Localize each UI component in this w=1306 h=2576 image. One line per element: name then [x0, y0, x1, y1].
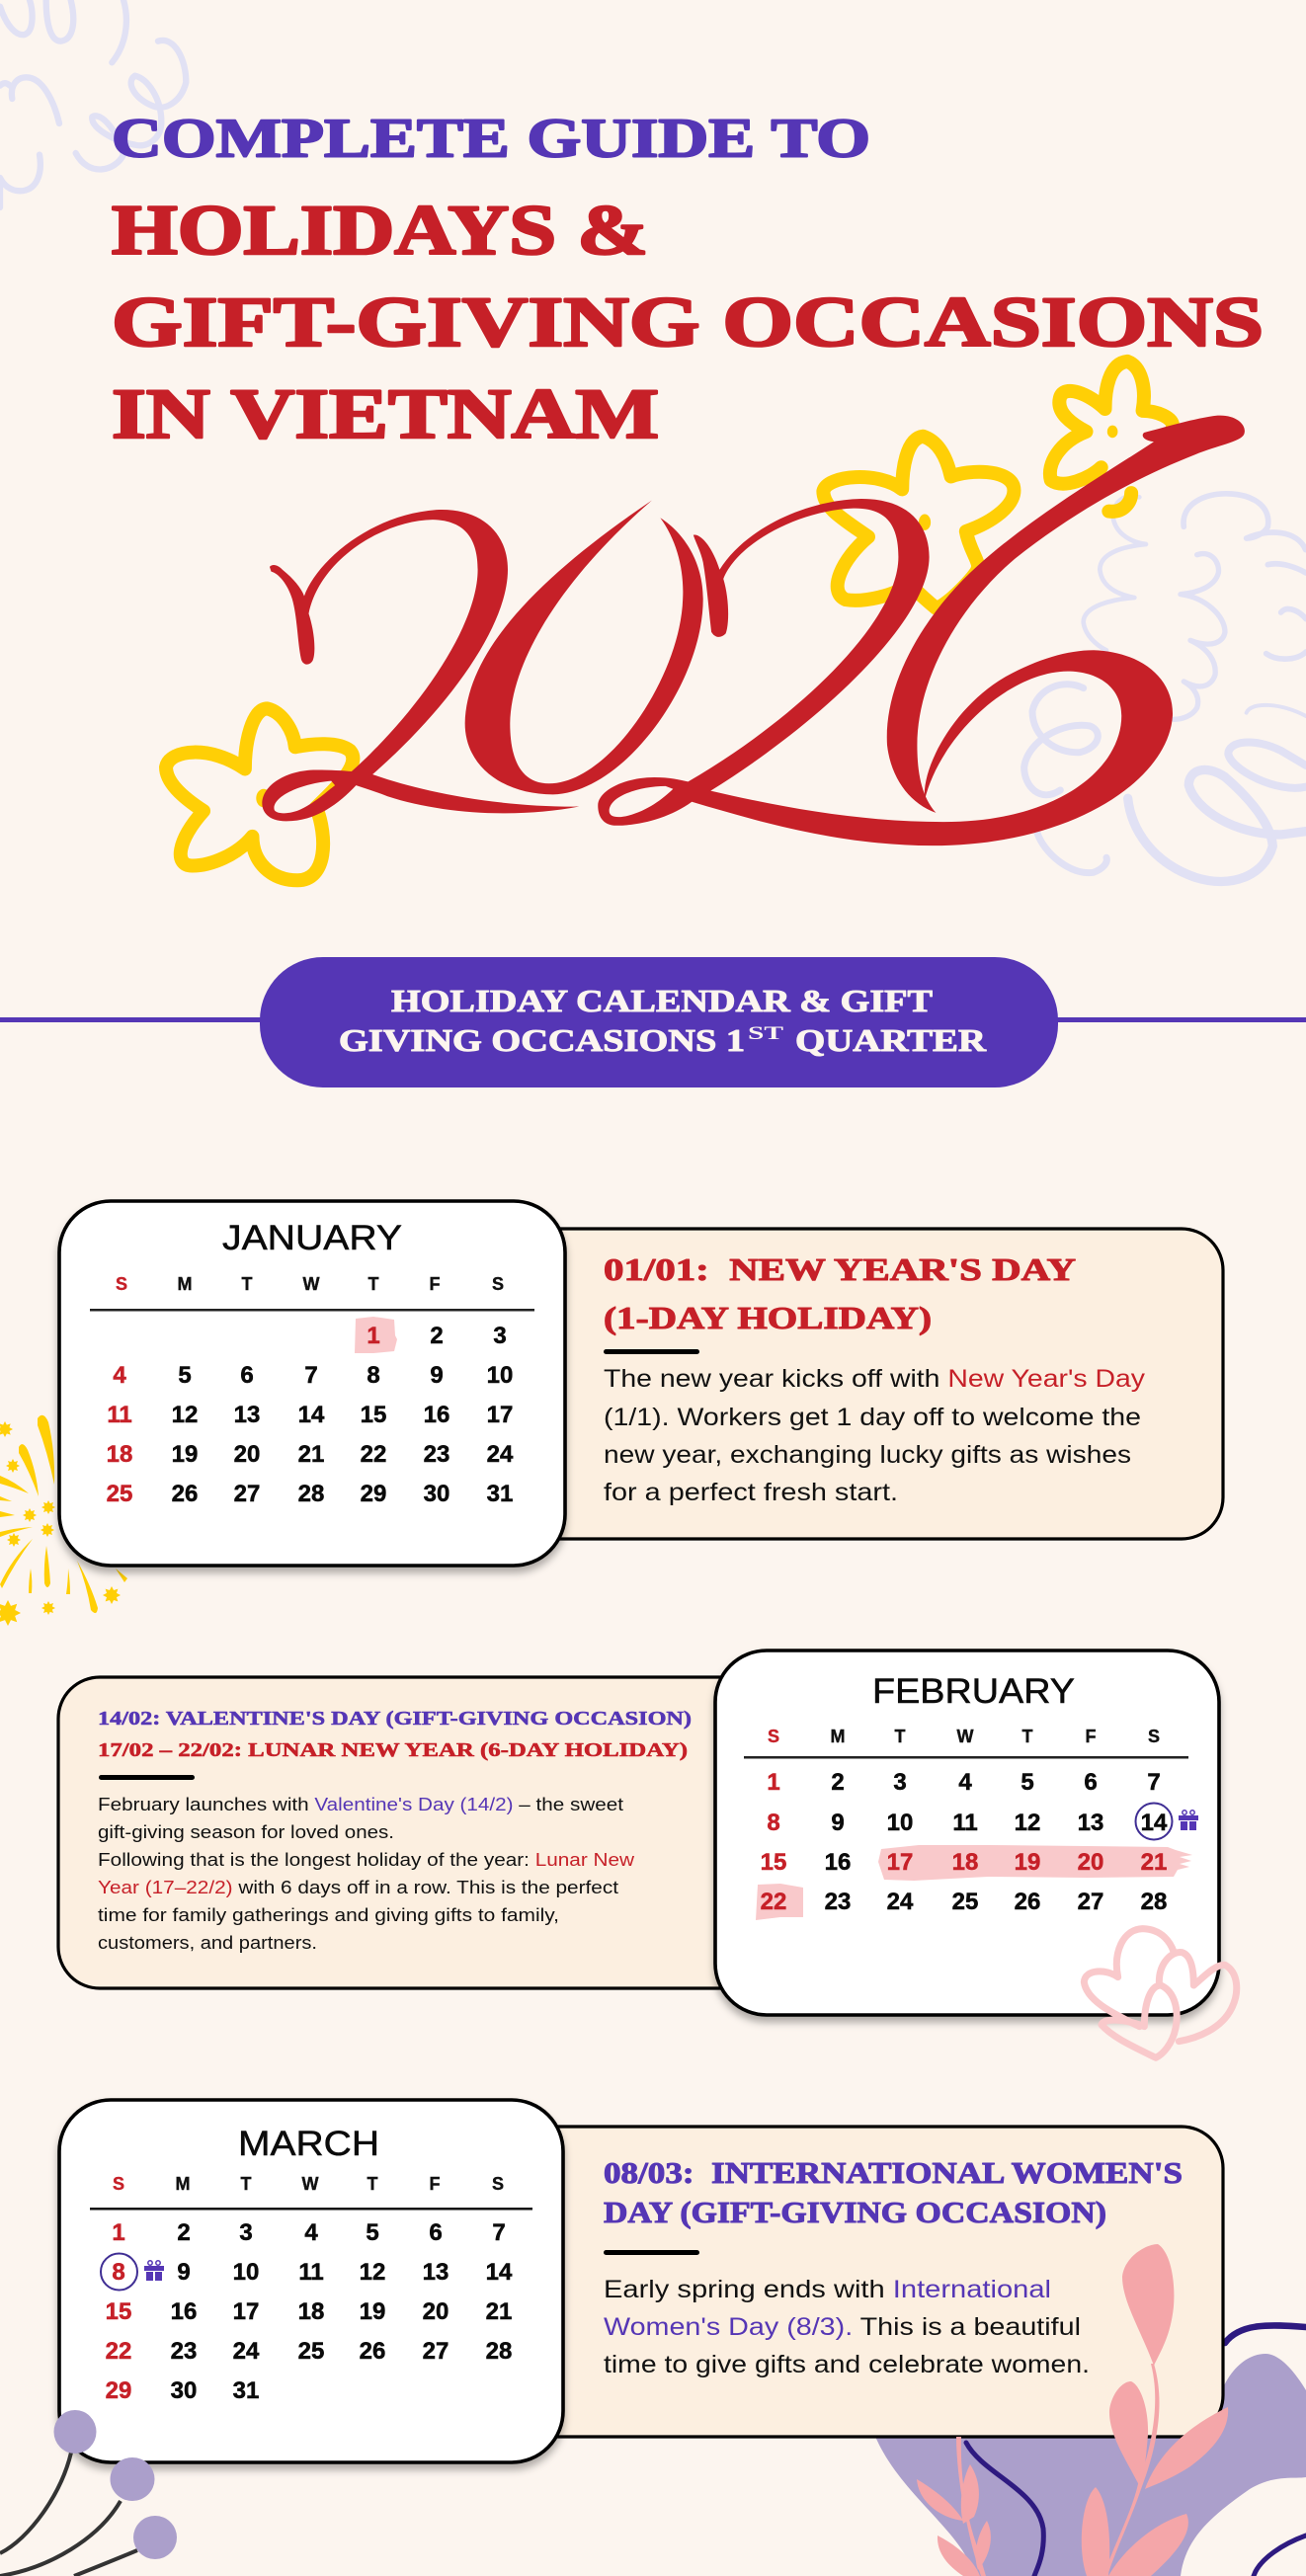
section banner: first quarter: QUARTER	[795, 1022, 987, 1058]
date grid: march: 27	[423, 2338, 449, 2365]
date grid: march: 17	[233, 2298, 259, 2325]
date grid: january: 14	[298, 1402, 325, 1428]
text: february description: gift-giving season for loved ones.	[98, 1822, 394, 1842]
calendar: march	[59, 2100, 563, 2462]
section banner: first quarter: ST	[748, 1023, 783, 1044]
title	[112, 109, 1264, 453]
heading: women's day: 08/03: INTERNATIONAL WOMEN'S	[604, 2155, 1183, 2190]
weekday header: T	[241, 2174, 251, 2194]
date grid: january: 10	[487, 1362, 513, 1389]
date grid: january: 7	[304, 1362, 318, 1389]
weekday header: S	[113, 2174, 124, 2194]
date grid: january: 23	[424, 1441, 449, 1468]
panel: international women's day	[514, 2127, 1223, 2437]
calendar: march: MARCH	[238, 2125, 379, 2163]
weekday header: T	[1021, 1727, 1033, 1746]
date grid: february: 2	[831, 1769, 845, 1796]
date grid: march: 14	[486, 2259, 513, 2286]
date grid: march: 3	[239, 2219, 253, 2246]
date grid: january: 19	[172, 1441, 198, 1468]
icon: gift	[1179, 1811, 1198, 1830]
date grid: february: 25	[952, 1889, 978, 1915]
date grid: january: 31	[487, 1481, 513, 1507]
decoration: lavender blob	[869, 2354, 1306, 2576]
date grid: march	[106, 2219, 513, 2404]
date grid: february: 15	[761, 1849, 786, 1876]
text: february description: customers, and partners.	[98, 1933, 317, 1953]
weekday header: F	[429, 1274, 441, 1294]
date grid: january: 4	[113, 1362, 126, 1389]
decoration: navy curved lines	[966, 2325, 1306, 2576]
date grid: january: 16	[424, 1402, 449, 1428]
heading: new year's day	[604, 1251, 1076, 1335]
date grid: january: 15	[361, 1402, 386, 1428]
heading: women's day: DAY (GIFT-GIVING OCCASION)	[604, 2195, 1106, 2229]
text: women's day description: Early spring ends with International	[604, 2276, 1051, 2303]
weekday header: T	[895, 1727, 905, 1746]
date grid: january: 28	[298, 1481, 324, 1507]
hero lettering: 2026	[262, 416, 1245, 845]
panel: new year's day	[514, 1229, 1223, 1539]
text: february description	[98, 1795, 635, 1953]
highlight: january 1	[355, 1317, 397, 1353]
date grid: march: 4	[304, 2219, 318, 2246]
weekday header: F	[1085, 1727, 1097, 1746]
heading: new year's day: 01/01: NEW YEAR'S DAY	[604, 1251, 1076, 1287]
panel: valentine's and lunar new year	[58, 1677, 770, 1988]
date grid: february: 27	[1078, 1889, 1103, 1915]
date grid: march: 11	[298, 2259, 324, 2286]
date grid: february: 5	[1020, 1769, 1034, 1796]
weekday header: W	[956, 1727, 974, 1746]
date grid: january: 22	[361, 1441, 386, 1468]
weekday header: S	[492, 1274, 504, 1294]
section banner: first quarter: GIVING OCCASIONS 1	[339, 1022, 745, 1058]
date grid: january: 1	[367, 1323, 380, 1349]
heading: lunar new year: 17/02 – 22/02: LUNAR NEW YEAR (6-DAY HOLIDAY)	[98, 1739, 688, 1761]
text: new year's day description: (1/1). Workers get 1 day off to welcome the	[604, 1404, 1141, 1431]
weekday header: M	[830, 1727, 846, 1746]
text: women's day description	[604, 2276, 1090, 2378]
date grid: january: 24	[487, 1441, 514, 1468]
date grid: february: 16	[825, 1849, 851, 1876]
date grid: february: 1	[767, 1769, 780, 1796]
date grid: february: 12	[1015, 1810, 1040, 1836]
date grid: january: 30	[424, 1481, 449, 1507]
date grid: march: 22	[106, 2338, 131, 2365]
date grid: march: 28	[486, 2338, 512, 2365]
date grid: march: 13	[423, 2259, 449, 2286]
date grid: january: 17	[487, 1402, 513, 1428]
date grid: march: 16	[171, 2298, 197, 2325]
weekday header	[113, 2174, 504, 2194]
date grid: february: 4	[958, 1769, 972, 1796]
text: new year's day description	[604, 1365, 1146, 1506]
date grid: january: 26	[172, 1481, 198, 1507]
heading: valentine's day: 14/02: VALENTINE'S DAY (GIFT-GIVING OCCASION)	[98, 1708, 692, 1730]
date grid: march: 9	[177, 2259, 191, 2286]
date grid: january: 29	[361, 1481, 386, 1507]
title line: holidays: HOLIDAYS &	[112, 191, 648, 270]
date grid: march: 12	[360, 2259, 385, 2286]
date grid: february: 18	[952, 1849, 978, 1876]
title line: in vietnam: IN VIETNAM	[112, 374, 659, 453]
date grid: february: 8	[767, 1810, 780, 1836]
date grid: march: 15	[106, 2298, 131, 2325]
date grid: january: 11	[107, 1402, 132, 1428]
date grid: january: 27	[234, 1481, 260, 1507]
weekday header: T	[367, 1274, 379, 1294]
date grid: february: 24	[887, 1889, 914, 1915]
weekday header: F	[429, 2174, 441, 2194]
icon: yellow flowers	[166, 362, 1173, 880]
date grid: january: 9	[430, 1362, 444, 1389]
date grid: january: 21	[298, 1441, 324, 1468]
date grid: february: 21	[1141, 1849, 1167, 1876]
text: women's day description: time to give gifts and celebrate women.	[604, 2351, 1090, 2378]
date grid: february: 20	[1078, 1849, 1103, 1876]
date grid: march: 21	[486, 2298, 512, 2325]
section banner: first quarter	[260, 957, 1058, 1087]
title line: gift-giving occasions: GIFT-GIVING OCCASIONS	[112, 282, 1264, 362]
icon: pink hearts	[1084, 1929, 1237, 2057]
weekday header: S	[1148, 1727, 1160, 1746]
calendar: january: JANUARY	[222, 1219, 402, 1257]
text: february description: time for family gatherings and giving gifts to family,	[98, 1905, 559, 1925]
weekday header: T	[241, 1274, 253, 1294]
date grid: february: 7	[1147, 1769, 1161, 1796]
decoration: top-left lavender swirls	[0, 0, 186, 207]
date grid: march: 29	[106, 2377, 131, 2404]
date grid: march: 19	[360, 2298, 385, 2325]
date grid: march: 1	[112, 2219, 125, 2246]
title line: complete guide: COMPLETE GUIDE TO	[112, 109, 870, 170]
date grid: january: 8	[367, 1362, 380, 1389]
weekday header: W	[302, 1274, 320, 1294]
date grid: january: 3	[493, 1323, 507, 1349]
date grid: february: 17	[887, 1849, 913, 1876]
heading: women's day	[604, 2155, 1183, 2229]
icon: gift	[144, 2261, 164, 2281]
text: new year's day description: new year, exchanging lucky gifts as wishes	[604, 1441, 1131, 1469]
weekday header: M	[176, 2174, 190, 2194]
date grid: march: 2	[177, 2219, 191, 2246]
date grid: january: 5	[178, 1362, 192, 1389]
decoration: right lavender swirls	[1024, 494, 1306, 881]
date grid: march: 5	[366, 2219, 379, 2246]
date grid: february	[761, 1769, 1168, 1915]
text: women's day description: Women's Day (8/3). This is a beautiful	[604, 2313, 1081, 2341]
highlight: february 22	[756, 1884, 803, 1920]
weekday header	[768, 1727, 1160, 1746]
date grid: january: 2	[430, 1323, 444, 1349]
calendar: february	[715, 1650, 1219, 2015]
date grid: february: 23	[825, 1889, 851, 1915]
weekday header: S	[768, 1727, 779, 1746]
date grid: march: 26	[360, 2338, 385, 2365]
calendar: january	[59, 1201, 565, 1566]
section banner: first quarter: HOLIDAY CALENDAR & GIFT	[391, 983, 933, 1018]
date grid: february: 19	[1015, 1849, 1040, 1876]
text: february description: February launches with Valentine's Day (14/2) – the sweet	[98, 1795, 623, 1814]
date grid: march: 30	[171, 2377, 197, 2404]
icon: yellow fireworks	[0, 1415, 127, 1626]
date grid: february: 9	[831, 1810, 845, 1836]
date grid: february: 26	[1015, 1889, 1040, 1915]
heading: new year's day: (1-DAY HOLIDAY)	[604, 1300, 932, 1335]
calendar: february: FEBRUARY	[872, 1672, 1075, 1711]
date grid: march: 8	[112, 2259, 125, 2286]
date grid: march: 6	[429, 2219, 443, 2246]
date grid: february: 6	[1084, 1769, 1098, 1796]
weekday header	[116, 1274, 504, 1294]
date grid: march: 31	[233, 2377, 259, 2404]
date grid: march: 10	[233, 2259, 259, 2286]
date grid: march: 7	[492, 2219, 506, 2246]
text: new year's day description: The new year kicks off with New Year's Day	[604, 1365, 1146, 1393]
date grid: march: 25	[298, 2338, 324, 2365]
text: february description: Following that is the longest holiday of the year: Lunar New	[98, 1850, 635, 1870]
decoration: pink leaves plant	[917, 2244, 1228, 2576]
date grid: march: 24	[233, 2338, 260, 2365]
date grid: january: 13	[234, 1402, 260, 1428]
icon: circle on 8	[101, 2254, 137, 2290]
weekday header: M	[178, 1274, 192, 1294]
text: new year's day description: for a perfect fresh start.	[604, 1479, 898, 1506]
divider line	[0, 1017, 1306, 1022]
date grid: february: 10	[887, 1810, 913, 1836]
weekday header: S	[116, 1274, 127, 1294]
weekday header: S	[492, 2174, 504, 2194]
date grid: march: 20	[423, 2298, 449, 2325]
date grid: january: 20	[234, 1441, 260, 1468]
date grid: march: 23	[171, 2338, 197, 2365]
date grid: january: 6	[240, 1362, 254, 1389]
decoration: lavender dots on stems	[0, 2410, 177, 2576]
date grid: february: 11	[952, 1810, 978, 1836]
date grid: february: 22	[761, 1889, 786, 1915]
highlight: lunar new year 17-21	[878, 1845, 1192, 1881]
date grid: february: 3	[893, 1769, 907, 1796]
date grid: february: 13	[1078, 1810, 1103, 1836]
weekday header: T	[367, 2174, 377, 2194]
date grid: january: 18	[107, 1441, 132, 1468]
text: february description: Year (17–22/2) with 6 days off in a row. This is the perfect	[98, 1878, 618, 1897]
date grid: february: 14	[1141, 1810, 1168, 1836]
date grid: february: 28	[1141, 1889, 1167, 1915]
date grid: january	[107, 1323, 514, 1507]
date grid: march: 18	[298, 2298, 324, 2325]
date grid: january: 25	[107, 1481, 132, 1507]
icon: circle on 14	[1136, 1804, 1172, 1839]
date grid: january: 12	[172, 1402, 198, 1428]
weekday header: W	[302, 2174, 318, 2194]
